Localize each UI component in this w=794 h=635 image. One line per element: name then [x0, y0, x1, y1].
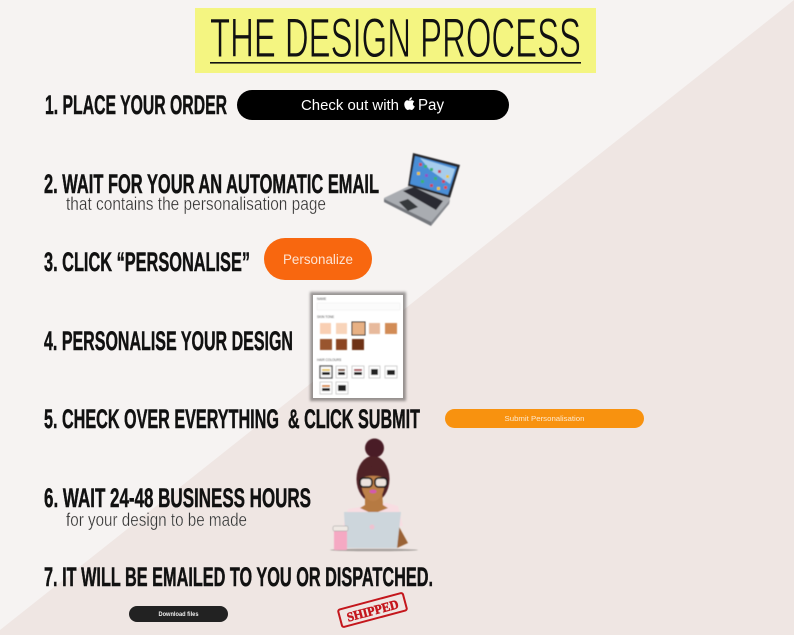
step 1 heading: 1. PLACE YOUR ORDER [45, 90, 227, 120]
button: submit personalisation: Submit Personalisation [504, 414, 584, 423]
personalisation form thumbnail: HAIR COLOURS [317, 358, 341, 362]
button: submit personalisation [445, 409, 644, 428]
step 6 heading: 6. WAIT 24-48 BUSINESS HOURS [44, 483, 311, 513]
button: personalize: Personalize [283, 252, 353, 267]
step 3 heading: 3. CLICK “PERSONALISE” [44, 247, 250, 277]
step 5 heading: 5. CHECK OVER EVERYTHING & CLICK SUBMIT [44, 404, 420, 434]
personalisation form thumbnail: SKIN TONE [317, 315, 334, 319]
stamp: shipped: SHIPPED [345, 596, 400, 625]
button: download files: Download files [158, 611, 199, 618]
button: personalize [264, 238, 372, 280]
button: check out with Apple Pay [237, 90, 509, 120]
title banner [195, 6, 596, 73]
step 6 subtext: for your design to be made [66, 510, 247, 530]
personalisation form thumbnail [310, 292, 406, 401]
button: check out with Apple Pay: Pay [418, 97, 444, 114]
step 2 subtext: that contains the personalisation page [66, 194, 326, 214]
illustration: woman with laptop and coffee [330, 438, 418, 551]
button: download files [129, 606, 228, 622]
step 4 heading: 4. PERSONALISE YOUR DESIGN [44, 326, 293, 356]
step 7 heading: 7. IT WILL BE EMAILED TO YOU OR DISPATCHED. [44, 562, 433, 592]
personalisation form thumbnail: NAME [317, 297, 326, 301]
icon: laptop [384, 153, 460, 226]
button: check out with Apple Pay: Check out with [301, 98, 399, 114]
step 2 heading: 2. WAIT FOR YOUR AN AUTOMATIC EMAIL [44, 169, 379, 199]
